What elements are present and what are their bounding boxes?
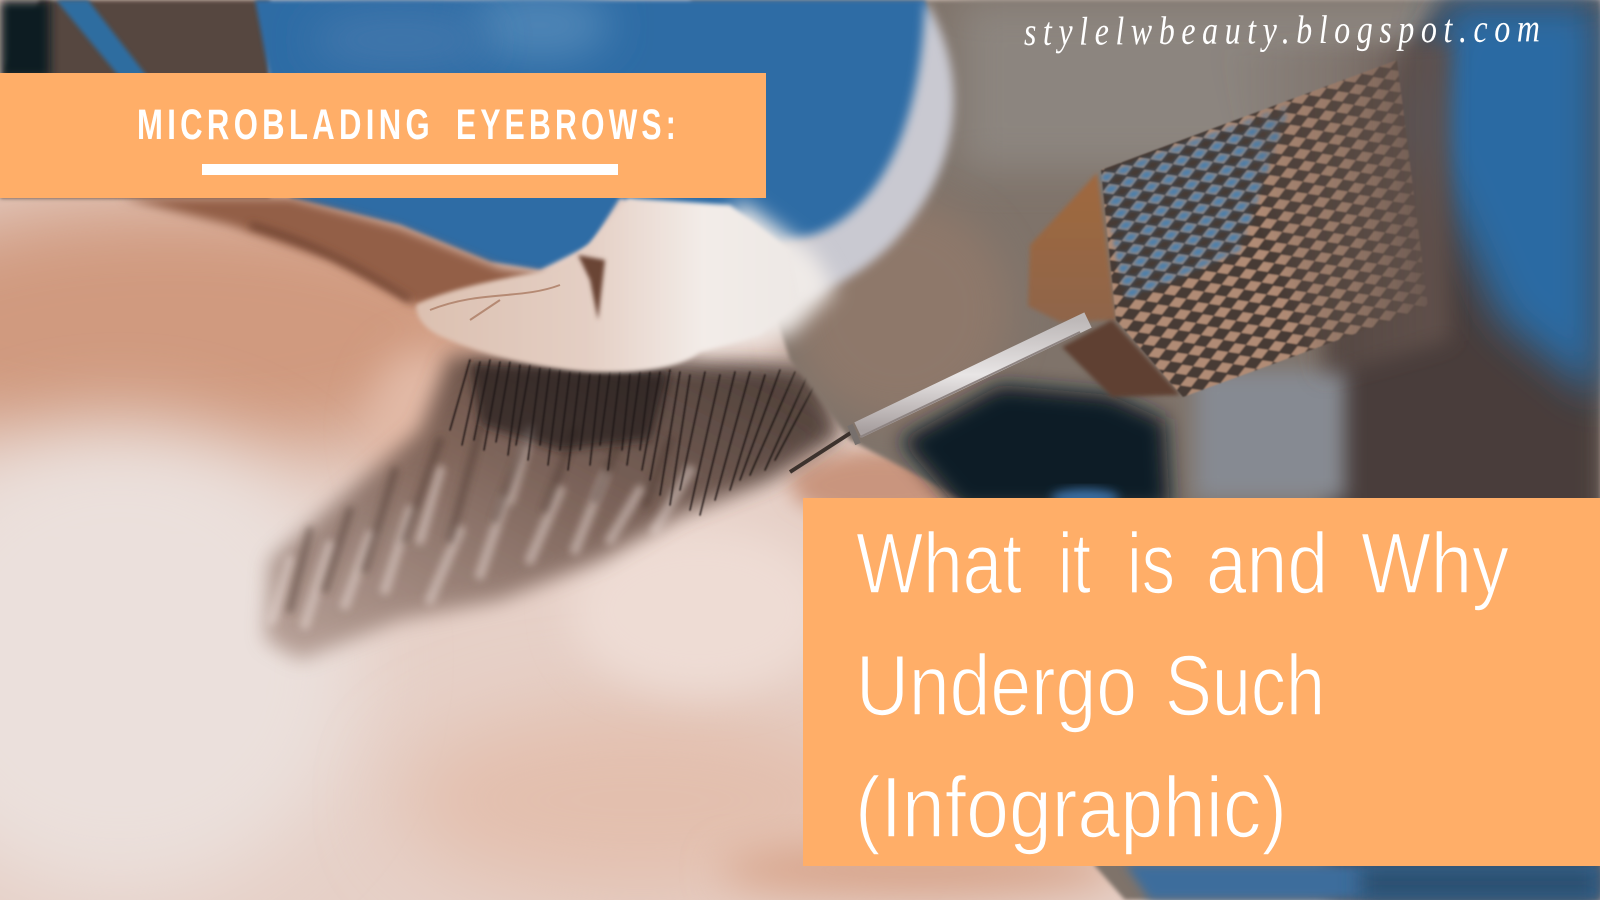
blurred backdrop right (690, 0, 1600, 900)
subtitle line 1: Why (1361, 516, 1509, 612)
needle (858, 320, 1088, 430)
knurled grip (1101, 40, 1450, 397)
subtitle line 1: What (856, 516, 1022, 612)
subtitle line 1 (856, 516, 1509, 612)
heading: microblading eyebrows: EYEBROWS: (456, 101, 680, 149)
subtitle line 3: (Infographic) (855, 760, 1287, 856)
panel: top title banner (0, 73, 766, 198)
gloved hand (0, 0, 954, 300)
subtitle line 1: it (1058, 516, 1091, 612)
subtitle line 2: Undergo (856, 638, 1137, 734)
heading: microblading eyebrows: MICROBLADING (137, 101, 434, 149)
title underline (202, 164, 618, 175)
blue strip at bottom (1125, 864, 1600, 900)
eyebrow (265, 355, 840, 660)
subtitle line 1: and (1206, 516, 1328, 612)
microblading tool (790, 40, 1450, 472)
collar (1028, 173, 1180, 397)
subtitle line 2: Such (1165, 638, 1325, 734)
thumb (416, 198, 835, 372)
subtitle line 1: is (1127, 516, 1175, 612)
blog url: stylelwbeauty.blogspot.com (1024, 6, 1540, 54)
panel: subtitle (803, 498, 1600, 866)
fold of skin beside nail (122, 198, 550, 305)
